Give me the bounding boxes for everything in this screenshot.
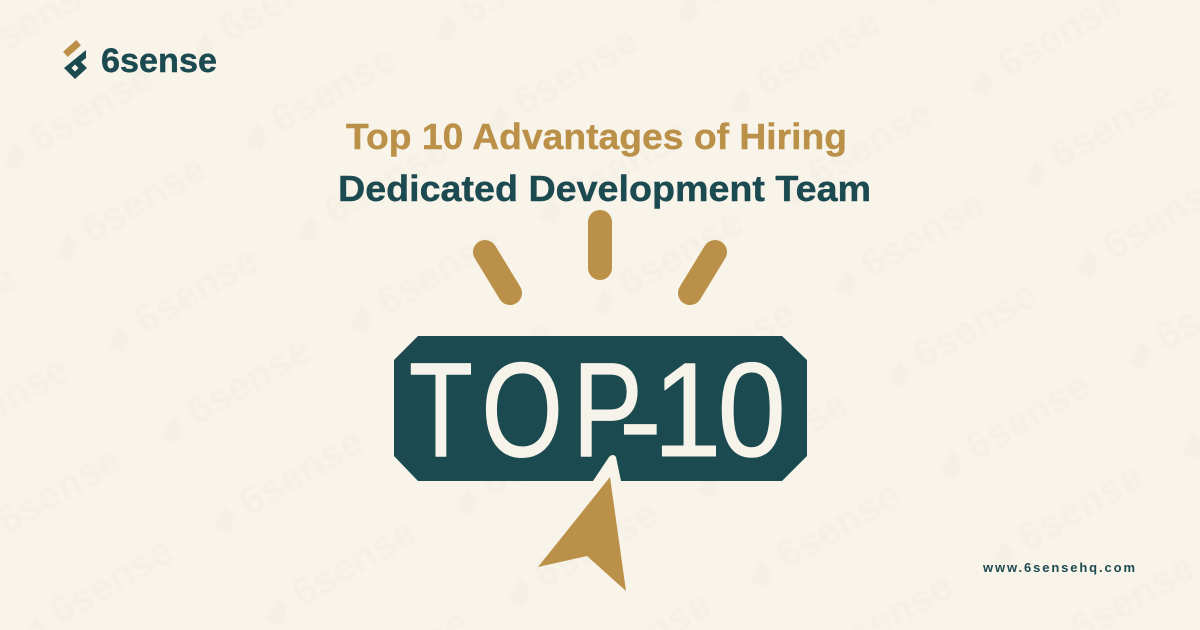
icon: logo mark (64, 45, 87, 79)
logo: 6sense (64, 42, 217, 80)
website url: www.6sensehq.com (982, 560, 1135, 575)
title line 1: Top 10 Advantages of Hiring (346, 116, 847, 157)
badge label (409, 335, 786, 494)
badge label: 10 (653, 335, 786, 485)
badge background (394, 336, 807, 481)
icon: highlight rays (485, 222, 715, 293)
icon: cursor arrow (538, 477, 626, 591)
badge label: TOP (409, 336, 643, 485)
logo wordmark: 6sense (101, 42, 217, 80)
top-10 badge (394, 335, 807, 494)
title (338, 116, 871, 209)
title line 2: Dedicated Development Team (338, 168, 871, 209)
badge label: - (618, 345, 663, 494)
